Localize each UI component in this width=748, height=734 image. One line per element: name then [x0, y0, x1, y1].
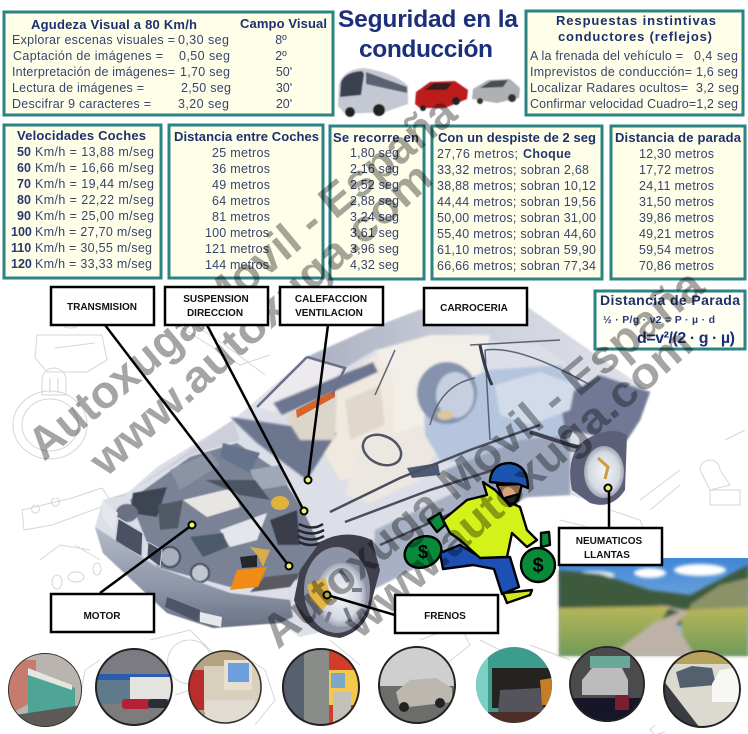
rows: velocidades: 70 — [17, 177, 31, 191]
watermark: Autoxuga Movil - España and www.autoxuga.com: www.autoxuga.com — [334, 319, 702, 648]
rows: distancias: 64 metros — [212, 194, 270, 208]
rows: velocidades: Km/h = 22,22 m/seg — [35, 193, 154, 207]
rows: segundos: 2,16 seg — [350, 162, 399, 176]
title — [338, 6, 518, 63]
photo 3: computer desk — [188, 650, 262, 724]
formula line 2: d=v²/(2 · g · µ) — [637, 330, 735, 347]
heading: se recorre: Se recorre en — [333, 130, 419, 145]
rows: agudeza values: Lectura de imágenes = — [12, 81, 144, 95]
rows: tiempos de reacción: Imprevistos de conducción= — [530, 65, 692, 79]
rows: segundos: 2,88 seg — [350, 194, 399, 208]
label: calefaccion ventilacion — [280, 287, 383, 325]
rows: distancias: 121 metros — [205, 242, 269, 256]
heading: respuestas: Respuestas instintivas — [556, 13, 716, 28]
rows: despiste: 50,00 metros; sobran 31,00 — [437, 211, 596, 225]
label: motor — [51, 594, 154, 632]
rows: velocidades: 50 — [17, 145, 31, 159]
engine bay — [116, 443, 323, 592]
rows: despiste: 38,88 metros; sobran 10,12 — [437, 179, 596, 193]
thief cartoon with money bags — [399, 463, 555, 603]
rows: agudeza values: 50' — [276, 65, 292, 79]
heading: despiste: Con un despiste de 2 seg — [438, 130, 596, 145]
rows: tiempos de reacción: A la frenada del vehículo = — [530, 49, 683, 63]
rows: velocidades — [11, 145, 154, 271]
rows: agudeza values: 20' — [276, 97, 292, 111]
rows: tiempos de reacción: Localizar Radares ocultos= — [530, 81, 688, 95]
rows: tiempos de reacción: 0,4 seg — [694, 49, 738, 63]
rows: distancias: 100 metros — [205, 226, 269, 240]
rows: agudeza values — [12, 33, 292, 111]
rows: velocidades: Km/h = 33,33 m/seg — [35, 257, 152, 271]
label: calefaccion ventilacion: VENTILACION — [295, 308, 363, 319]
yellow fluid cap — [271, 496, 289, 510]
car body base — [95, 307, 650, 637]
rows: agudeza values: 8º — [275, 33, 287, 47]
panel: se recorre en — [330, 126, 424, 279]
icon: bus — [338, 68, 408, 117]
rows: distancias: 144 metros — [205, 258, 269, 272]
cabin floor — [345, 425, 440, 503]
pale blue floor — [425, 365, 590, 465]
jacket — [443, 482, 537, 558]
heading: velocidades: Velocidades Coches — [17, 128, 146, 143]
rows: segundos: 4,32 seg — [350, 258, 399, 272]
rows: velocidades: Km/h = 25,00 m/seg — [35, 209, 154, 223]
left money bag: $ — [418, 542, 428, 562]
trousers — [440, 545, 519, 594]
watermark: Autoxuga Movil - España and www.autoxuga.com: Autoxuga Movil - España — [17, 84, 466, 470]
rows: despiste: 27,76 metros; — [437, 147, 518, 161]
background technical line drawings — [13, 305, 745, 734]
label: carroceria — [424, 288, 527, 325]
rows: segundos: 3,96 seg — [350, 242, 399, 256]
rows: velocidades: 60 — [17, 161, 31, 175]
rows: tiempos de reacción: 1,6 seg — [696, 65, 738, 79]
rows: distancias — [205, 146, 270, 272]
rows: parada: 12,30 metros — [639, 147, 714, 161]
label: suspension direccion: SUSPENSION — [183, 294, 249, 305]
heading: respuestas — [556, 13, 716, 44]
rows: segundos: 3,24 seg — [350, 210, 399, 224]
orange indicator — [230, 567, 267, 590]
dark roof frame lines — [257, 357, 345, 407]
panel: distancia de parada — [611, 126, 745, 279]
spare wheel — [417, 362, 477, 424]
rows: velocidades: 80 — [17, 193, 31, 207]
rows: agudeza values: 2,50 seg — [181, 81, 231, 95]
heading: respuestas: conductores (reflejos) — [558, 29, 712, 44]
label: neumaticos llantas: NEUMATICOS — [576, 536, 643, 547]
rows: parada — [639, 147, 714, 273]
suspension spring — [298, 524, 324, 545]
rows: parada: 70,86 metros — [639, 259, 714, 273]
label: transmision — [51, 287, 154, 325]
photo 7: car on lift — [569, 646, 645, 722]
rows: parada: 31,50 metros — [639, 195, 714, 209]
photo 6: dark car in green garage — [476, 647, 552, 723]
rows: parada: 17,72 metros — [639, 163, 714, 177]
hood — [103, 420, 240, 500]
rows: segundos — [350, 146, 399, 272]
steering wheel — [358, 429, 406, 471]
orange door strip — [296, 390, 335, 418]
label: suspension direccion — [165, 287, 268, 325]
photo row: workshop circles — [8, 646, 741, 728]
photo 2: dealership — [95, 648, 173, 726]
hat — [490, 463, 528, 488]
heading: agudeza: Agudeza Visual a 80 Km/h — [31, 17, 197, 32]
rows: velocidades: Km/h = 13,88 m/seg — [35, 145, 154, 159]
rows: parada: 39,86 metros — [639, 211, 714, 225]
front seat — [320, 355, 395, 480]
lower chassis — [445, 435, 570, 520]
rows: agudeza values: Explorar escenas visuales = — [12, 33, 175, 47]
rows: despiste: 66,66 metros; sobran 77,34 — [437, 259, 596, 273]
label: calefaccion ventilacion: CALEFACCION — [295, 294, 367, 305]
panel: velocidades coches — [4, 125, 161, 278]
formula line 1: ½ · P/g · v2 = P · µ · d — [603, 314, 715, 326]
windshield — [257, 357, 343, 412]
heading: distancia entre coches: Distancia entre Coches — [174, 129, 319, 144]
rows: parada: 49,21 metros — [639, 227, 714, 241]
right money bag: $ — [532, 555, 544, 577]
photo 8: showroom cars — [663, 650, 741, 728]
headlight — [102, 500, 118, 530]
front bumper — [95, 527, 293, 628]
label: frenos: FRENOS — [424, 611, 466, 622]
right money bag — [521, 532, 555, 582]
label: neumaticos llantas: LLANTAS — [584, 550, 630, 561]
panel: con un despiste — [432, 126, 602, 279]
photo 4: equipment — [282, 648, 360, 726]
rows: despiste: 55,40 metros; sobran 44,60 — [437, 227, 596, 241]
roof and pale rear — [230, 307, 650, 590]
label: transmision: TRANSMISION — [67, 302, 137, 313]
panel: agudeza visual — [4, 12, 333, 115]
rows: distancias: 81 metros — [212, 210, 270, 224]
rows: agudeza values: Interpretación de imágenes= — [12, 65, 175, 79]
icon: red car — [415, 81, 468, 111]
rows: agudeza values: 0,30 seg — [178, 33, 229, 47]
rear quarter — [560, 375, 650, 440]
photo 1: green storefront — [8, 653, 82, 727]
rows: tiempos de reacción — [530, 49, 739, 111]
rows: agudeza values: 3,20 seg — [178, 97, 229, 111]
heading: formula: Distancia de Parada — [600, 292, 740, 308]
rows: parada: 59,54 metros — [639, 243, 714, 257]
title: Seguridad en la — [338, 6, 518, 33]
rows: agudeza values: Captación de imágenes = — [13, 49, 163, 63]
rows: segundos: 2,52 seg — [350, 178, 399, 192]
panel: formula distancia de parada — [595, 291, 745, 349]
watermark: Autoxuga Movil - España and www.autoxuga.com — [17, 84, 714, 658]
rows: velocidades: Km/h = 19,44 m/seg — [35, 177, 154, 191]
label: motor: MOTOR — [83, 611, 121, 622]
rows: agudeza values: 30' — [276, 81, 292, 95]
label: suspension direccion: DIRECCION — [187, 308, 243, 319]
landscape photo — [559, 558, 748, 656]
rows: despiste — [437, 147, 596, 273]
rear wheel — [570, 431, 627, 505]
watermark: Autoxuga Movil - España and www.autoxuga.com: www.autoxuga.com — [79, 153, 442, 486]
car illustration — [95, 307, 650, 638]
rows: segundos: 1,80 seg — [350, 146, 399, 160]
rows: tiempos de reacción: Confirmar velocidad Cuadro=1,2 seg — [530, 97, 738, 111]
rows: velocidades: Km/h = 16,66 m/seg — [35, 161, 154, 175]
rows: despiste: 33,32 metros; sobran 2,68 — [437, 163, 589, 177]
rows: distancias: 25 metros — [212, 146, 270, 160]
rows: distancias: 49 metros — [212, 178, 270, 192]
heading: distancia de parada: Distancia de parada — [615, 130, 742, 145]
icon: silver car — [472, 79, 520, 104]
heading: campo visual: Campo Visual — [240, 16, 327, 31]
rows: velocidades: Km/h = 27,70 m/seg — [35, 225, 152, 239]
left money bag — [399, 513, 447, 574]
rows: agudeza values: Descifrar 9 caracteres = — [12, 97, 151, 111]
rows: segundos: 3,61 seg — [350, 226, 399, 240]
shoe — [503, 590, 532, 603]
rows: velocidades: 90 — [17, 209, 31, 223]
rows: velocidades: 120 — [11, 257, 32, 271]
rows: despiste: 61,10 metros; sobran 59,90 — [437, 243, 596, 257]
rows: agudeza values: 2º — [275, 49, 287, 63]
door panel — [285, 392, 337, 440]
face — [497, 484, 522, 506]
door band — [273, 362, 378, 415]
radiator grille — [115, 518, 162, 567]
rows: velocidades: 100 — [11, 225, 32, 239]
leader lines — [100, 325, 612, 615]
rows: velocidades: 110 — [11, 241, 31, 255]
rows: tiempos de reacción: 3,2 seg — [696, 81, 739, 95]
dark console and pipes — [407, 463, 440, 478]
cowl — [230, 417, 337, 480]
rows: agudeza values: 0,50 seg — [179, 49, 230, 63]
label: carroceria: CARROCERIA — [440, 303, 508, 314]
rows: parada: 24,11 metros — [639, 179, 714, 193]
rows: velocidades: Km/h = 30,55 m/seg — [35, 241, 152, 255]
rows: despiste: Choque — [523, 147, 571, 161]
rows: agudeza values: 1,70 seg — [180, 65, 230, 79]
rear seat — [375, 335, 490, 445]
panel: distancia entre coches — [169, 125, 323, 278]
title: conducción — [359, 36, 493, 63]
rows: despiste: 44,44 metros; sobran 19,56 — [437, 195, 596, 209]
label: frenos — [395, 595, 498, 633]
label: neumaticos llantas — [559, 528, 662, 565]
rows: distancias: 36 metros — [212, 162, 270, 176]
panel: respuestas instintivas — [526, 11, 743, 115]
watermark: Autoxuga Movil - España and www.autoxuga.com: Autoxuga Movil - España — [251, 258, 714, 658]
front wheel — [294, 534, 380, 638]
photo 5: silver car in workshop — [378, 646, 456, 724]
